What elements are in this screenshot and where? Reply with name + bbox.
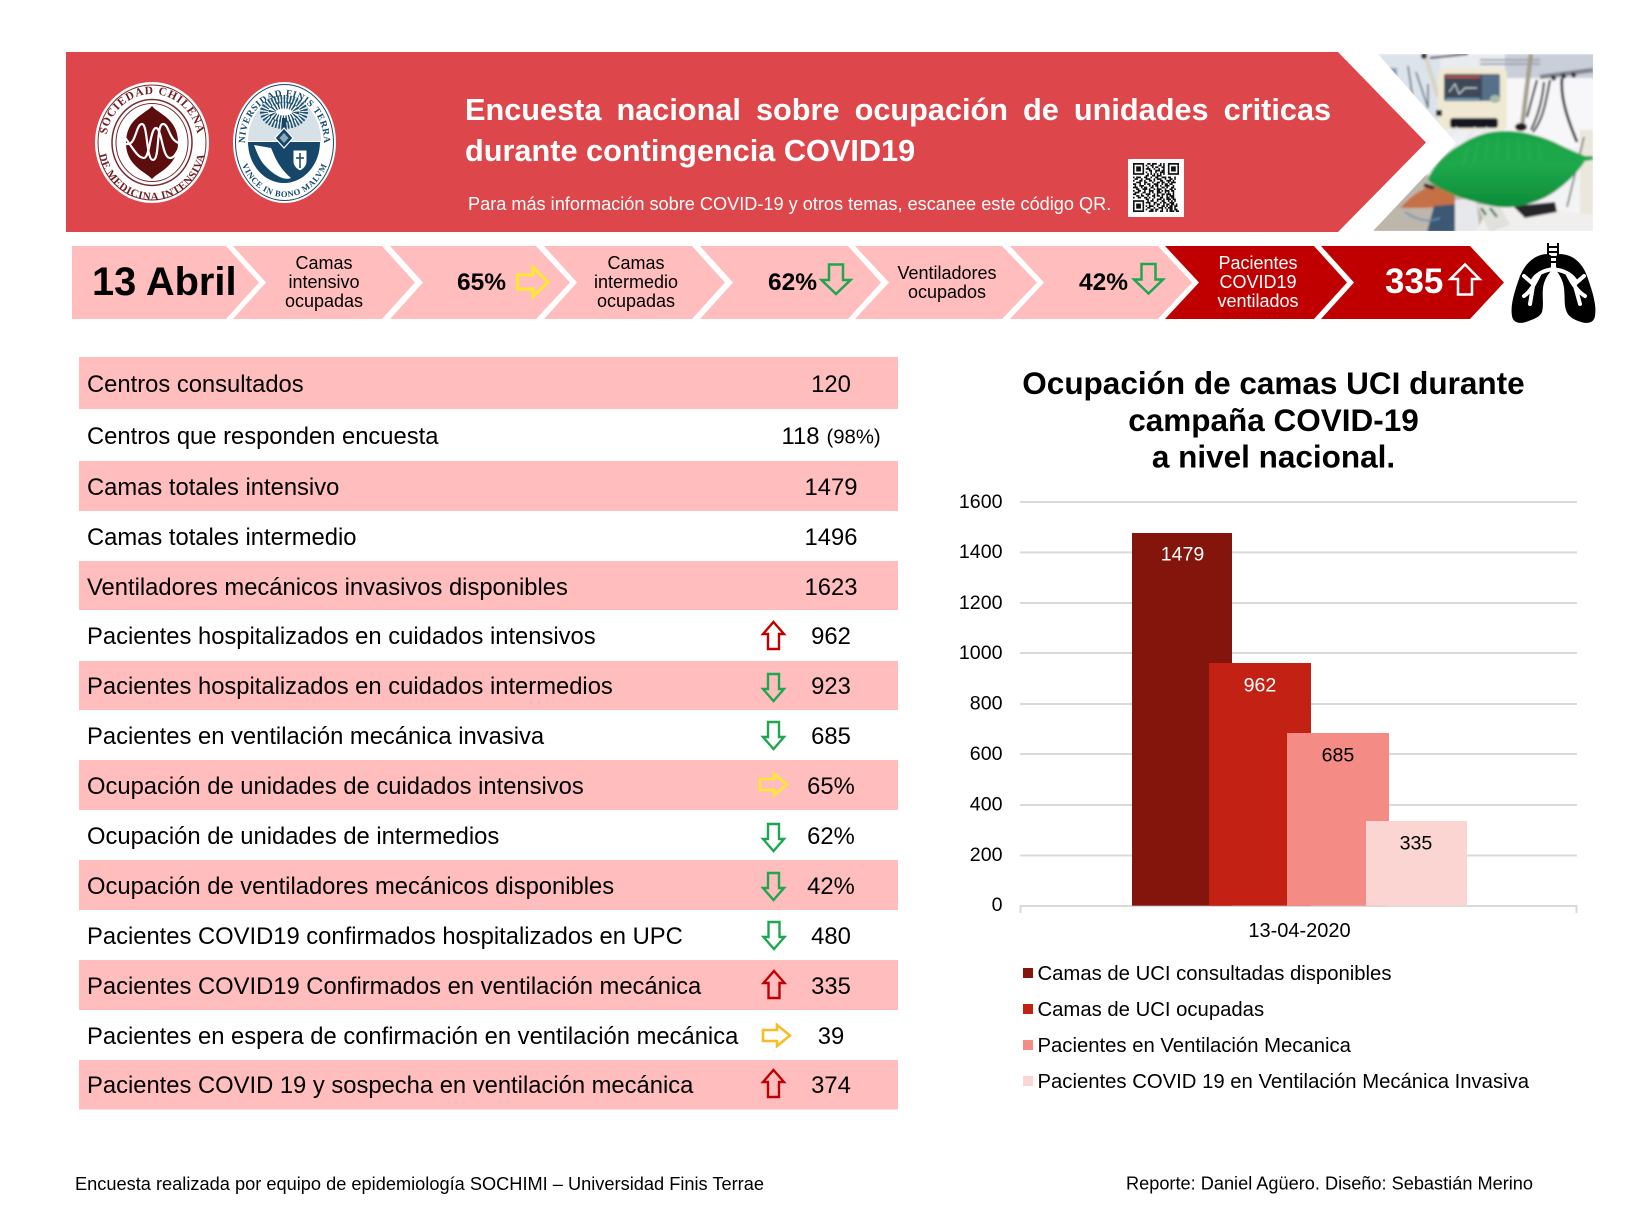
chevron: camas intensivo ocupadas: Camas	[295, 253, 353, 273]
chart title: a nivel nacional.	[1152, 438, 1395, 474]
chevron: pacientes COVID19 ventilados: COVID19	[1219, 272, 1297, 292]
row: Ocupación intermedios	[87, 823, 855, 851]
chevron: 335: 335	[1385, 262, 1443, 301]
chevron: ventiladores ocupados: ocupados	[908, 282, 986, 302]
QR code	[1128, 159, 1184, 217]
chevron: camas intensivo ocupadas: ocupadas	[285, 291, 363, 311]
row: espera de confirmación: Pacientes en espera de confirmación en ventilación mecánica	[87, 1023, 739, 1050]
row: Ocupación cuidados intensivos: 65%	[807, 773, 855, 800]
row: Ocupación cuidados intensivos	[79, 760, 898, 810]
row: COVID 19 y sospecha: 374	[811, 1072, 851, 1099]
row: COVID 19 y sospecha	[79, 1060, 898, 1110]
row: COVID 19 y sospecha: Pacientes COVID 19 y sospecha en ventilación mecánica	[87, 1072, 694, 1099]
row: Ocupación ventiladores: 42%	[807, 873, 855, 900]
legend item: camas ocupadas: Camas de UCI ocupadas	[1038, 999, 1264, 1021]
row: Centros que responden encuesta	[87, 423, 881, 450]
row: COVID19 hospitalizados UPC: Pacientes COVID19 confirmados hospitalizados en UPC	[87, 923, 683, 950]
photo: ventilator and green resuscitation bag	[1370, 53, 1595, 232]
row: Centros que responden encuesta: (98%)	[826, 426, 881, 448]
row: Ocupación ventiladores: Ocupación de ventiladores mecánicos disponibles	[87, 873, 614, 900]
row: Ventiladores disponibles: 1623	[805, 574, 857, 601]
chevron: pacientes COVID19 ventilados: Pacientes	[1218, 253, 1298, 273]
y axis labels: 1000	[959, 642, 1003, 664]
chart title: Ocupación de camas UCI durante	[1022, 365, 1525, 401]
bar: 335	[1366, 821, 1467, 906]
table: survey results	[79, 357, 898, 1110]
row: Ocupación intermedios: 62%	[807, 823, 855, 850]
y axis labels: 800	[970, 692, 1003, 714]
row: espera de confirmación: 39	[818, 1023, 844, 1050]
logo: Sociedad Chilena de Medicina Intensiva: SOCIEDAD CHILENA	[100, 86, 204, 134]
title: Encuesta nacional sobre ocupación de unidades criticas	[465, 92, 1331, 127]
row: Camas totales intensivo: 1479	[805, 474, 857, 501]
chevron: 65%	[390, 246, 570, 319]
y axis labels: 1400	[959, 541, 1003, 563]
title	[465, 92, 1331, 168]
chevron: camas intermedio ocupadas: ocupadas	[597, 291, 675, 311]
row: Camas totales intermedio: 1496	[805, 524, 857, 551]
row: Camas totales intensivo: Camas totales intensivo	[87, 474, 339, 501]
bar: 335: 335	[1400, 832, 1432, 854]
chevron: 42%	[1010, 246, 1192, 319]
row: Camas totales intermedio: Camas totales intermedio	[87, 524, 356, 551]
chevron: ventiladores ocupados	[855, 246, 1037, 319]
chevron: camas intensivo ocupadas	[233, 246, 415, 319]
row: Pacientes cuidados intensivos	[87, 622, 851, 650]
row: Centros que responden encuesta: Centros que responden encuesta	[87, 423, 439, 450]
bar: 962	[1209, 663, 1311, 906]
legend item: camas consultadas: Camas de UCI consultadas disponibles	[1038, 963, 1391, 985]
chart title: campaña COVID-19	[1128, 402, 1419, 438]
chevron: 62%: 62%	[768, 269, 817, 296]
row: Pacientes cuidados intermedios	[79, 661, 898, 710]
row: COVID19 ventilación: Pacientes COVID19 Confirmados en ventilación mecánica	[87, 973, 702, 1000]
chart title	[1022, 365, 1525, 474]
chevron: camas intensivo ocupadas: intensivo	[288, 272, 360, 292]
logo: Universidad Finis Terrae: VINCE IN BONO MALVM	[242, 162, 327, 198]
chevron: date	[72, 246, 259, 319]
chevron: 62%	[700, 246, 881, 319]
y axis labels: 1200	[959, 592, 1003, 614]
row: COVID19 ventilación	[79, 960, 898, 1010]
x axis label: 13-04-2020	[1248, 920, 1351, 942]
chevron: camas intermedio ocupadas: Camas	[607, 253, 665, 273]
chevron: date: 13 Abril	[92, 260, 236, 304]
chevron: pacientes COVID19 ventilados: ventilados	[1217, 291, 1299, 311]
row: Pacientes cuidados intensivos: Pacientes hospitalizados en cuidados intensivos	[87, 623, 596, 650]
row: Centros que responden encuesta: 118	[782, 423, 819, 450]
row: Camas totales intensivo	[79, 461, 898, 511]
chevron: ventiladores ocupados: Ventiladores	[897, 263, 997, 283]
ventilator	[1436, 68, 1507, 141]
bar: 1479: 1479	[1161, 544, 1204, 566]
header banner	[66, 52, 1426, 232]
row: Pacientes ventilación invasiva	[87, 722, 851, 750]
row: Ocupación ventiladores	[79, 860, 898, 910]
row: Ocupación intermedios: Ocupación de unidades de intermedios	[87, 823, 499, 850]
chevron: 335	[1321, 246, 1504, 319]
chart legend	[1023, 963, 1530, 1093]
row: Centros consultados: Centros consultados	[87, 371, 304, 398]
chevron: 65%: 65%	[457, 269, 506, 296]
title: durante contingencia COVID19	[465, 133, 915, 168]
row: Pacientes cuidados intermedios: 923	[811, 673, 851, 700]
row: COVID19 hospitalizados UPC: 480	[811, 923, 851, 950]
y axis labels: 600	[970, 743, 1003, 765]
row: Camas totales intermedio	[87, 524, 857, 551]
logo: Sociedad Chilena de Medicina Intensiva	[95, 82, 209, 203]
bar chart	[959, 491, 1577, 942]
logo: Sociedad Chilena de Medicina Intensiva: DE MEDICINA INTENSIVA	[100, 152, 204, 200]
y axis labels: 200	[970, 844, 1003, 866]
row: Ocupación cuidados intensivos: Ocupación de unidades de cuidados intensivos	[87, 773, 584, 800]
row: Ventiladores disponibles	[79, 561, 898, 610]
bar: 685: 685	[1322, 744, 1354, 766]
icon: lungs	[1512, 243, 1595, 323]
row: COVID19 ventilación: 335	[811, 973, 851, 1000]
row: Ventiladores disponibles: Ventiladores mecánicos invasivos disponibles	[87, 574, 568, 601]
y axis labels: 400	[970, 794, 1003, 816]
green bag	[1428, 131, 1593, 207]
QR note: Para más información sobre COVID-19 y otros temas, escanee este código QR.	[468, 194, 1111, 214]
row: Pacientes ventilación invasiva: Pacientes en ventilación mecánica invasiva	[87, 723, 545, 750]
bar: 962: 962	[1244, 674, 1276, 696]
legend item: COVID 19 ventilación: Pacientes COVID 19 en Ventilación Mecánica Invasiva	[1038, 1071, 1530, 1093]
chevron: camas intermedio ocupadas	[544, 246, 725, 319]
y axis labels: 0	[992, 894, 1003, 916]
bar: 685	[1287, 733, 1389, 906]
bar: 1479	[1132, 533, 1232, 906]
y axis labels	[959, 491, 1003, 916]
chevron: pacientes COVID19 ventilados	[1165, 246, 1347, 319]
row: Centros consultados	[79, 357, 898, 409]
chevron: camas intermedio ocupadas: intermedio	[594, 272, 678, 292]
row: Pacientes cuidados intensivos: 962	[811, 623, 851, 650]
footer: report credit: Reporte: Daniel Agüero. Diseño: Sebastián Merino	[1126, 1174, 1533, 1194]
y axis labels: 1600	[959, 491, 1003, 513]
legend item: ventilación mecánica: Pacientes en Ventilación Mecanica	[1038, 1035, 1352, 1057]
footer: survey credit: Encuesta realizada por equipo de epidemiología SOCHIMI – Universidad Finis Terrae	[75, 1174, 764, 1194]
row: Pacientes ventilación invasiva: 685	[811, 723, 851, 750]
chevron: 42%: 42%	[1079, 269, 1128, 296]
row: Centros consultados: 120	[811, 371, 851, 398]
logo: Universidad Finis Terrae	[233, 82, 336, 203]
row: Pacientes cuidados intermedios: Pacientes hospitalizados en cuidados intermedios	[87, 673, 613, 700]
